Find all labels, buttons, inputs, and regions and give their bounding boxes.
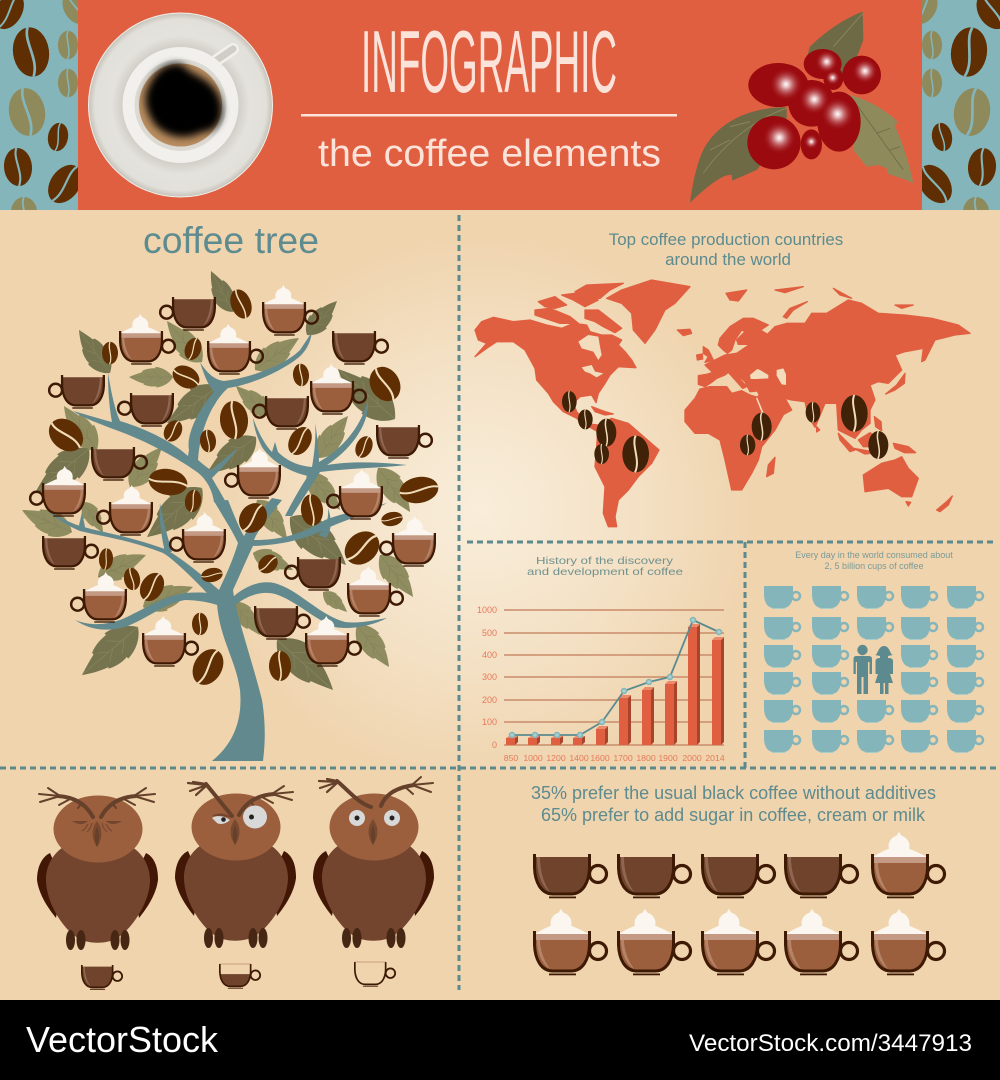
map inland seas — [578, 335, 786, 417]
owl: sleepy — [37, 788, 158, 950]
x axis labels: 2000 — [682, 753, 702, 763]
header band — [0, 0, 1000, 227]
glow background for main panels — [0, 211, 1000, 768]
owl: wide awake — [313, 777, 434, 948]
x axis labels: 1400 — [569, 753, 589, 763]
x axis labels: 1700 — [613, 753, 633, 763]
panel: owls — [37, 777, 434, 990]
heading: top coffee production countries — [609, 230, 843, 269]
y axis labels — [477, 605, 497, 750]
x axis labels: 1900 — [658, 753, 678, 763]
x axis labels: 2014 — [705, 753, 725, 763]
y axis labels: 300 — [482, 672, 497, 682]
footer band — [0, 1000, 1000, 1080]
footer logo text: VectorStock — [26, 1019, 219, 1060]
x axis labels: 1000 — [523, 753, 543, 763]
small cup: half — [220, 964, 260, 989]
tree coffee cups — [30, 285, 435, 667]
tree trunk and branches — [47, 332, 407, 761]
small cup: empty — [355, 962, 395, 987]
tree coffee beans — [42, 286, 440, 690]
chart heading — [527, 555, 683, 578]
preferences text: 65% prefer to add sugar in coffee, cream or milk — [541, 805, 926, 825]
y axis labels: 500 — [482, 628, 497, 638]
x axis labels: 1600 — [590, 753, 610, 763]
owl: one eye open — [175, 782, 296, 948]
consumption text — [795, 550, 953, 571]
heading: top coffee production countries: around the world — [665, 250, 791, 269]
preferences text: 35% prefer the usual black coffee without additives — [531, 783, 936, 803]
world map — [475, 280, 970, 527]
consumption text: 2, 5 billion cups of coffee — [825, 561, 923, 571]
y axis labels: 400 — [482, 650, 497, 660]
icon: coffee cup on saucer — [88, 13, 272, 197]
section dashed dividers — [0, 215, 996, 990]
x axis labels: 1800 — [636, 753, 656, 763]
panel: history chart — [477, 555, 725, 763]
map bean markers — [562, 391, 888, 472]
chart heading: History of the discovery — [536, 555, 674, 567]
heading: coffee tree: coffee tree — [143, 220, 319, 261]
right bean pattern strip — [922, 0, 1000, 210]
chart grid lines — [504, 610, 724, 745]
subtitle: the coffee elements — [318, 133, 661, 175]
panel: world map — [475, 230, 970, 527]
y axis labels: 200 — [482, 695, 497, 705]
title rule — [301, 114, 677, 116]
preferences text — [531, 783, 936, 825]
red header panel — [78, 0, 922, 210]
trend line — [510, 618, 722, 738]
x axis labels: 850 — [504, 753, 518, 763]
x axis labels — [504, 753, 725, 763]
consumption text: Every day in the world consumed about — [795, 550, 953, 560]
header band: INFOGRAPHIC — [361, 12, 617, 111]
teal cups grid — [764, 586, 983, 753]
x axis labels: 1200 — [546, 753, 566, 763]
panel: coffee preferences — [531, 783, 944, 975]
footer url text: VectorStock.com/3447913 — [689, 1030, 972, 1057]
panel: coffee tree — [17, 220, 440, 761]
icon: coffee berries — [690, 12, 913, 203]
cups row 2 — [534, 908, 944, 975]
cups row 1 — [534, 832, 944, 898]
map land masses — [475, 280, 970, 527]
heading: top coffee production countries: Top coffee production countries — [609, 230, 843, 249]
panel: daily consumption — [764, 550, 983, 753]
chart heading: and development of coffee — [527, 566, 683, 578]
small cup: full — [82, 965, 122, 990]
y axis labels: 0 — [492, 740, 497, 750]
bars — [506, 624, 724, 745]
tree leaves — [17, 266, 423, 703]
y axis labels: 100 — [482, 717, 497, 727]
y axis labels: 1000 — [477, 605, 497, 615]
icon: man and woman — [854, 645, 893, 694]
left bean pattern strip — [0, 0, 78, 210]
